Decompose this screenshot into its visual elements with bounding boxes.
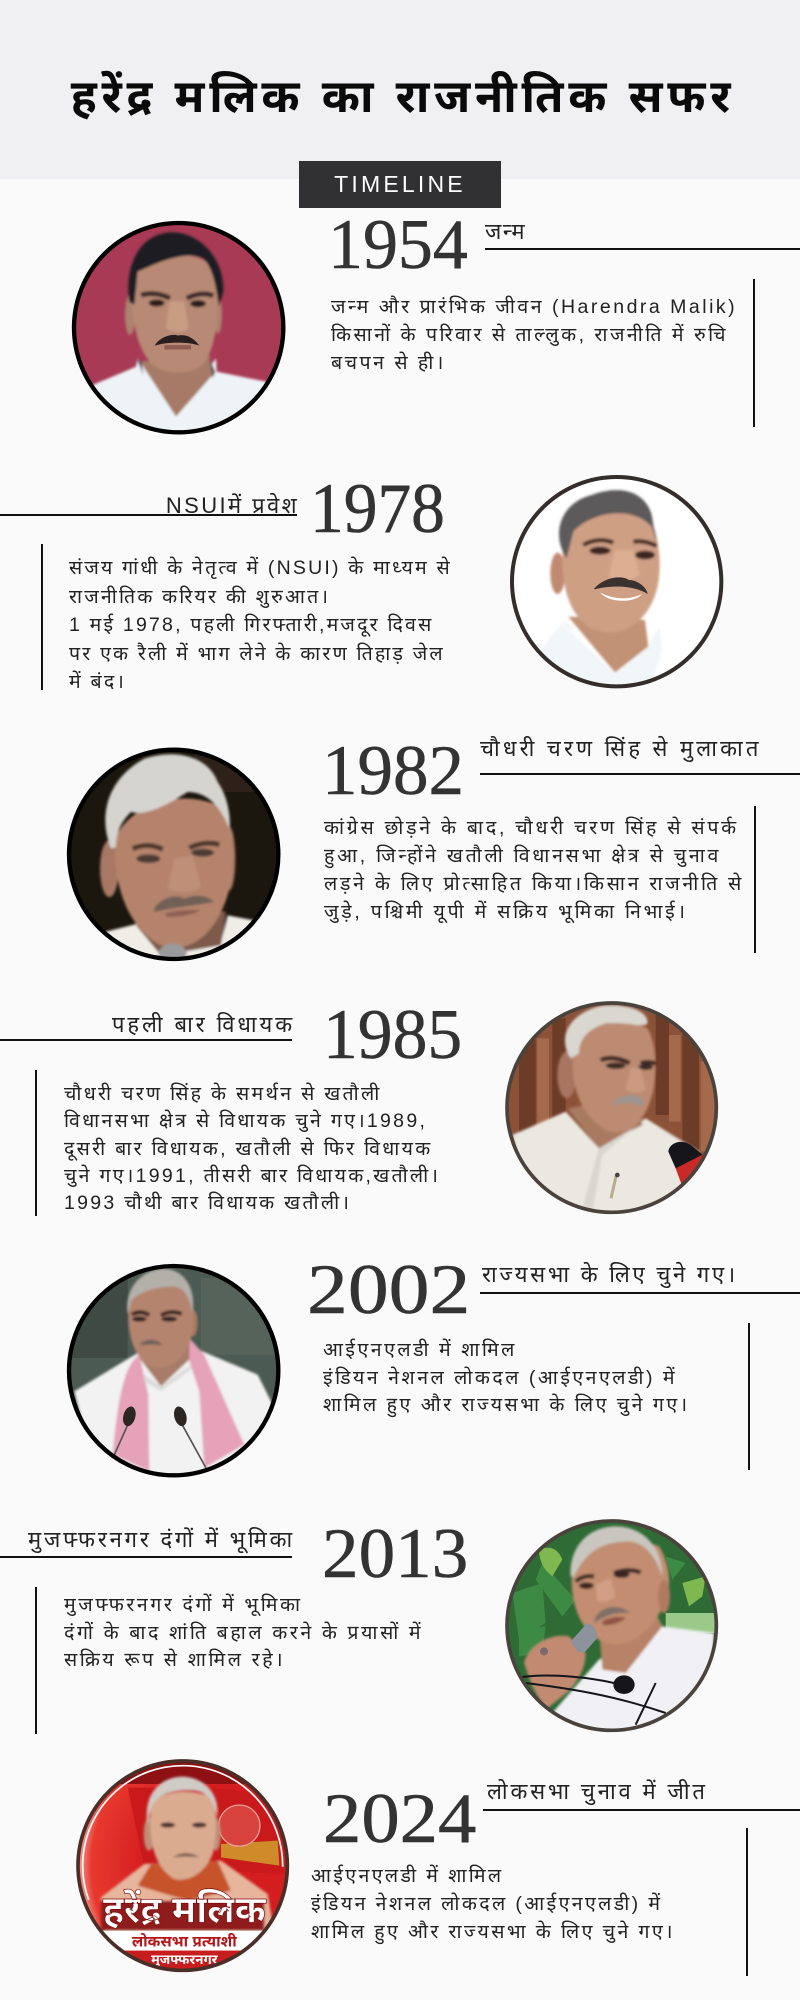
panel: 2013 Muzaffarnagar riots (0, 1515, 718, 1734)
description (323, 1338, 690, 1418)
description: चौधरी चरण सिंह के समर्थन से खतौली (64, 1083, 382, 1105)
horizontal rule (480, 773, 800, 775)
description (331, 296, 737, 374)
description (324, 816, 744, 924)
year: 1978 (310, 470, 445, 548)
horizontal rule (0, 1039, 292, 1041)
vertical rule (35, 1587, 37, 1734)
description: किसानों के परिवार से ताल्लुक, राजनीति में रुचि (331, 324, 728, 346)
description: आईएनएलडी में शामिल (311, 1865, 504, 1887)
description: राजनीतिक करियर की शुरुआत। (69, 586, 330, 608)
event label: पहली बार विधायक (112, 1012, 295, 1037)
title: हरेंद्र मलिक का राजनीतिक सफर (71, 70, 735, 122)
portrait: stone background with pink scarf (66, 1264, 280, 1478)
timeline badge: TIMELINE (334, 171, 466, 197)
description: विधानसभा क्षेत्र से विधायक चुने गए।1989, (64, 1110, 427, 1132)
description: दूसरी बार विधायक, खतौली से फिर विधायक (64, 1138, 433, 1160)
event label: लोकसभा चुनाव में जीत (487, 1779, 708, 1804)
event label: NSUIमें प्रवेश (166, 493, 299, 518)
description (311, 1864, 675, 1944)
description (64, 1082, 440, 1214)
panel: 2024 Lok Sabha (76, 1759, 800, 1976)
description (69, 556, 452, 693)
description: पर एक रैली में भाग लेने के कारण तिहाड़ जेल (69, 642, 445, 664)
vertical rule (753, 279, 755, 427)
vertical rule (748, 1323, 750, 1470)
description: में बंद। (69, 671, 126, 693)
description: इंडियन नेशनल लोकदल (आईएनएलडी) में (311, 1893, 662, 1915)
vertical rule (746, 1828, 748, 1976)
portrait: campaign badge: हरेंद्र मलिक (103, 1888, 267, 1930)
vertical rule (35, 1070, 37, 1216)
description: मुजफ्फरनगर दंगों में भूमिका (64, 1594, 303, 1616)
header band (0, 0, 800, 179)
description: हुआ, जिन्होंने खतौली विधानसभा क्षेत्र से चुनाव (324, 845, 721, 867)
year: 1982 (322, 732, 464, 810)
description: बचपन से ही। (331, 352, 446, 374)
portrait: campaign badge (76, 1759, 290, 1972)
description: इंडियन नेशनल लोकदल (आईएनएलडी) में (323, 1366, 677, 1388)
description: शामिल हुए और राज्यसभा के लिए चुने गए। (311, 1921, 675, 1943)
portrait: campaign badge: मुजफ्फरनगर (151, 1952, 219, 1969)
panel: 1978 NSUI (0, 470, 724, 693)
year: 2024 (323, 1780, 476, 1858)
portrait: green leaves background (505, 1519, 718, 1732)
description: सक्रिय रूप से शामिल रहे। (64, 1649, 285, 1671)
event label: जन्म (485, 219, 526, 244)
portrait: campaign badge: लोकसभा प्रत्याशी (132, 1933, 237, 1951)
horizontal rule (483, 1809, 800, 1811)
event label: मुजफ्फरनगर दंगों में भूमिका (28, 1527, 295, 1552)
portrait: dark background (66, 748, 280, 962)
panel: 1982 Chaudhary Charan Singh (66, 732, 800, 962)
panel: 2002 Rajya Sabha (66, 1251, 800, 1478)
year: 1954 (328, 206, 468, 284)
vertical rule (41, 544, 43, 690)
description: जुड़े, पश्चिमी यूपी में सक्रिय भूमिका निभाई। (324, 901, 688, 923)
horizontal rule (480, 1292, 800, 1294)
description: शामिल हुए और राज्यसभा के लिए चुने गए। (323, 1394, 690, 1416)
description: कांग्रेस छोड़ने के बाद, चौधरी चरण सिंह से संपर्क (324, 817, 739, 839)
vertical rule (754, 806, 756, 953)
horizontal rule (485, 248, 800, 250)
description: 1993 चौथी बार विधायक खतौली। (64, 1192, 351, 1214)
portrait: red background (72, 220, 286, 434)
horizontal rule (0, 1556, 292, 1558)
portrait: white background (510, 475, 724, 688)
year: 2002 (307, 1251, 470, 1329)
description (64, 1594, 423, 1671)
description: आईएनएलडी में शामिल (323, 1339, 517, 1361)
panel: 1985 first MLA (0, 996, 718, 1216)
timeline badge (299, 161, 501, 208)
description: जन्म और प्रारंभिक जीवन (Harendra Malik) (331, 296, 737, 318)
description: लड़ने के लिए प्रोत्साहित किया।किसान राजनीति से (324, 873, 744, 895)
event label: चौधरी चरण सिंह से मुलाकात (480, 736, 762, 761)
year: 1985 (323, 996, 462, 1074)
description: चुने गए।1991, तीसरी बार विधायक,खतौली। (64, 1165, 440, 1187)
description: 1 मई 1978, पहली गिरफ्तारी,मजदूर दिवस (69, 614, 433, 636)
year: 2013 (322, 1515, 468, 1593)
panel: 1954 birth (72, 206, 800, 434)
event label: राज्यसभा के लिए चुने गए। (482, 1262, 738, 1287)
horizontal rule (0, 514, 297, 516)
description: संजय गांधी के नेतृत्व में (NSUI) के माध्यम से (69, 557, 452, 579)
description: दंगों के बाद शांति बहाल करने के प्रयासों में (64, 1622, 423, 1644)
portrait: wood background (505, 1001, 718, 1214)
